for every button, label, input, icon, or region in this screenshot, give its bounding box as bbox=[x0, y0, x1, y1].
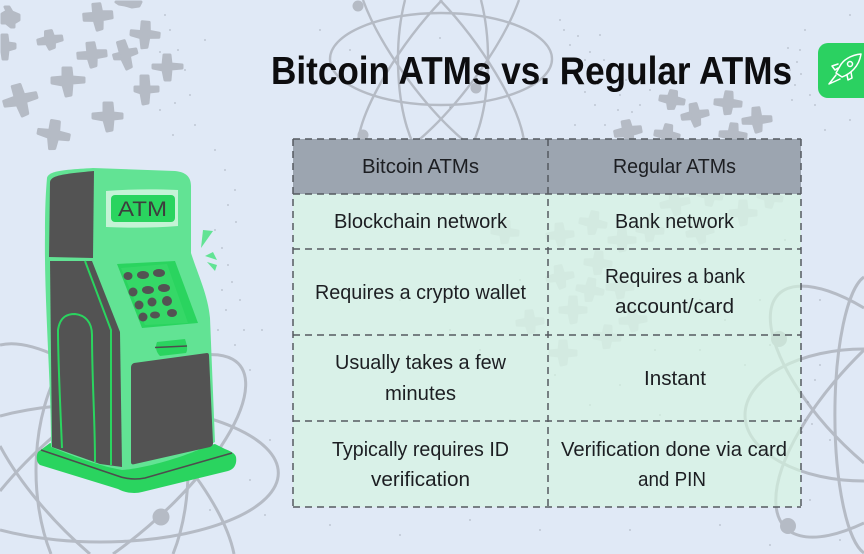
table body background bbox=[293, 194, 801, 507]
column headers bbox=[362, 155, 736, 178]
row: network bbox=[334, 210, 735, 233]
ATM dark lower side bbox=[50, 261, 122, 467]
ATM sign: ATM bbox=[118, 198, 167, 221]
row: verification: verification bbox=[371, 468, 470, 491]
ATM base bbox=[37, 443, 236, 493]
ATM base shadow line bbox=[41, 450, 232, 479]
row: verification: Typically requires ID bbox=[332, 438, 509, 461]
ATM side trim lines bbox=[58, 261, 111, 465]
row: network: Blockchain network bbox=[334, 210, 508, 233]
ATM cash panel bbox=[131, 353, 213, 464]
illustration: green ATM machine bbox=[37, 168, 236, 493]
row: requirements: account/card bbox=[615, 295, 734, 318]
row: speed: Usually takes a few bbox=[335, 351, 506, 374]
row: requirements: Requires a bank bbox=[605, 265, 746, 288]
row: verification: and PIN bbox=[638, 468, 706, 491]
row: requirements bbox=[315, 265, 746, 318]
row: requirements: Requires a crypto wallet bbox=[315, 281, 526, 304]
ATM body bbox=[45, 168, 215, 470]
plus cluster: behind table bbox=[491, 183, 784, 365]
atom: top center bbox=[330, 0, 552, 172]
row: verification bbox=[332, 438, 787, 491]
atom: bottom right bbox=[745, 277, 864, 553]
column headers: Bitcoin ATMs bbox=[362, 155, 479, 178]
row: verification: Verification done via card bbox=[561, 438, 787, 461]
table header background bbox=[293, 139, 801, 194]
ATM sign bbox=[106, 189, 178, 228]
row: network: Bank network bbox=[615, 210, 735, 233]
icon: spark marks bbox=[201, 230, 217, 271]
column headers: Regular ATMs bbox=[613, 155, 736, 178]
row: speed: minutes bbox=[385, 382, 456, 405]
row: speed: Instant bbox=[644, 367, 706, 390]
plus cluster: top left bbox=[1, 2, 182, 152]
table dashed grid bbox=[293, 139, 801, 507]
plus cluster: above table bbox=[613, 89, 772, 147]
ATM dark upper side bbox=[49, 171, 94, 258]
icon: green rocket badge bbox=[818, 43, 864, 98]
ATM card slot bbox=[155, 339, 187, 356]
comparison table bbox=[293, 139, 801, 507]
title: Bitcoin ATMs vs. Regular ATMs bbox=[271, 50, 792, 93]
ATM keypad bbox=[117, 261, 198, 328]
row: speed bbox=[335, 351, 706, 405]
atom: bottom left bbox=[0, 330, 278, 554]
